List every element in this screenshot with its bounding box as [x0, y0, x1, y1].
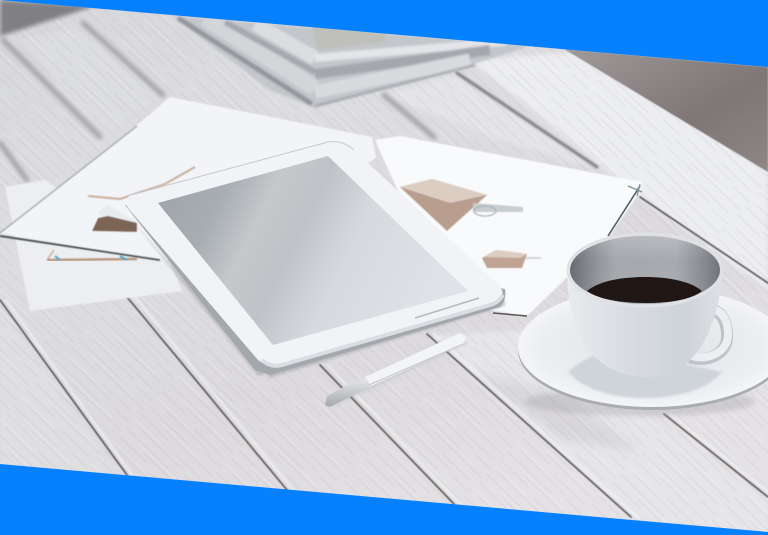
brown block on the sheet [92, 205, 137, 232]
tablet body [126, 142, 503, 366]
stack of magazines [172, 16, 530, 108]
stack side pages [178, 18, 315, 104]
cup rim [568, 234, 722, 306]
tablet shadow [132, 220, 505, 378]
coffee cup [567, 234, 728, 377]
bottom blue band [0, 464, 768, 535]
tablet edge [125, 205, 505, 375]
cup shadow on saucer [568, 350, 722, 398]
top blue band [0, 0, 768, 67]
tablet [125, 142, 505, 378]
stylus pen [325, 333, 470, 409]
cup inner [570, 236, 720, 304]
dark corner top left [0, 0, 95, 36]
wooden block two [482, 250, 541, 268]
saucer shadow [525, 388, 755, 416]
cup body [567, 272, 723, 377]
stack front pages [315, 42, 505, 106]
coffee saucer [518, 287, 768, 416]
tablet home button [415, 298, 479, 318]
paper: lower left sheet [5, 180, 182, 311]
tan sketch lines on the sheet [88, 167, 195, 199]
paper: upper left sheet [0, 97, 376, 262]
paper: right sheet [375, 136, 642, 316]
coffee [587, 277, 702, 303]
cup handle [692, 309, 728, 359]
dark wall behind the table [564, 49, 768, 172]
tablet screen [158, 156, 468, 345]
chart lines on lower left sheet [47, 250, 137, 260]
wooden block one [400, 179, 523, 231]
